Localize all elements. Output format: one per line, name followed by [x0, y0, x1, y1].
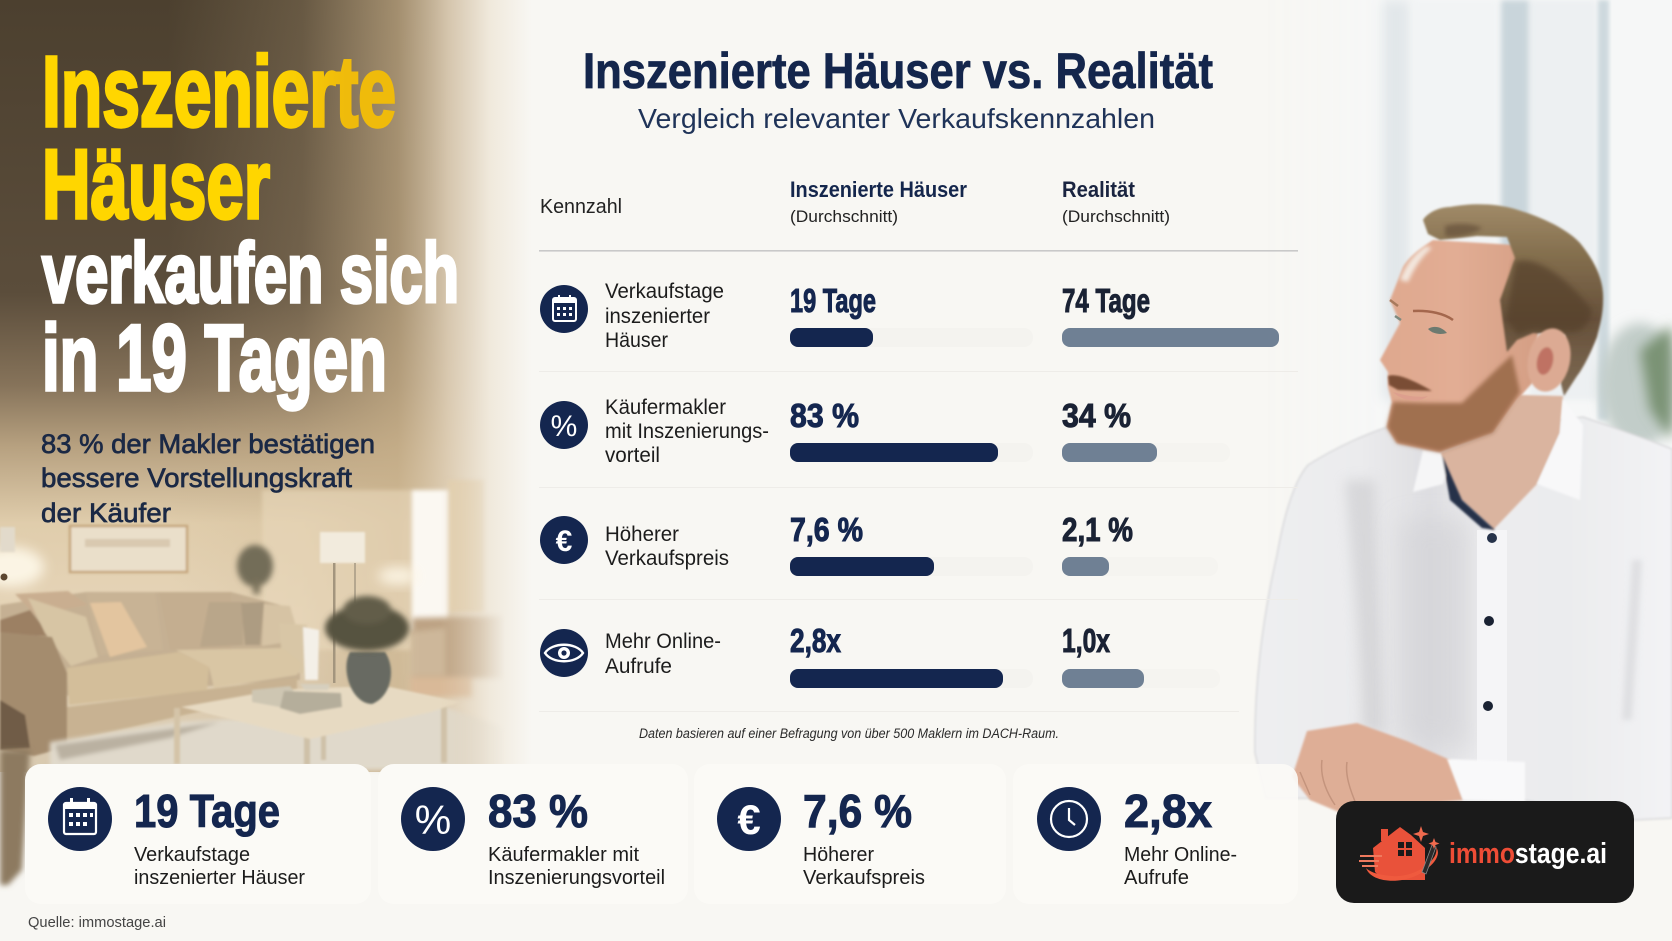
footnote: Daten basieren auf einer Befragung von über 500 Maklern im DACH-Raum.	[639, 726, 1059, 741]
bar: reality	[1062, 669, 1220, 688]
row 2: Käufermakler	[540, 396, 1230, 467]
icon: calendar	[540, 285, 588, 333]
table title: Inszenierte Häuser vs. Realität	[583, 43, 1213, 99]
card label	[134, 844, 305, 889]
right background: blurred window and plant	[1380, 0, 1672, 445]
bar: reality	[1062, 443, 1230, 462]
row label	[605, 396, 769, 467]
row 1: Verkaufstage	[540, 280, 1279, 352]
eye and brow	[1390, 300, 1453, 334]
row label: Käufermakler	[605, 396, 726, 419]
ear	[1522, 324, 1576, 396]
sub headline: 83 % der Makler bestätigen	[41, 429, 375, 459]
bar: reality	[1062, 557, 1218, 576]
sub headline	[41, 429, 375, 528]
floor lamp	[320, 532, 418, 683]
sub headline: bessere Vorstellungskraft	[41, 463, 352, 493]
card label: Käufermakler mit	[488, 844, 639, 866]
card label: Aufrufe	[1124, 867, 1189, 889]
headline line 2: Häuser	[42, 129, 270, 239]
icon: euro	[717, 787, 781, 851]
headline line 4: in 19 Tagen	[42, 305, 387, 410]
card value: 19 Tage	[134, 785, 280, 837]
face	[1380, 240, 1540, 452]
card value: 83 %	[488, 785, 588, 837]
forehead highlight	[1400, 246, 1432, 282]
card label	[488, 844, 665, 889]
left edge behind cards	[0, 750, 30, 885]
bar: staged	[790, 328, 1033, 347]
row label: vorteil	[605, 444, 660, 467]
hair	[1423, 204, 1603, 396]
row label: Verkaufstage	[605, 280, 724, 303]
hand	[1292, 723, 1463, 812]
shirt placket	[1477, 530, 1507, 765]
icon: percent	[540, 401, 588, 449]
table subtitle: Vergleich relevanter Verkaufskennzahlen	[638, 103, 1155, 134]
value: reality: 74 Tage	[1062, 282, 1150, 319]
row label	[605, 630, 721, 678]
card label: Verkaufspreis	[803, 867, 925, 889]
value: staged: 83 %	[790, 397, 859, 434]
bar: staged	[790, 557, 1033, 576]
card: 19 Tage	[25, 764, 371, 904]
headline line 1: Inszenierte	[42, 36, 396, 148]
card label: inszenierter Häuser	[134, 867, 305, 889]
icon: euro: €	[737, 796, 761, 843]
row label: inszenierter	[605, 305, 710, 328]
armchair by window	[410, 616, 510, 697]
table header: Realität	[1062, 177, 1170, 226]
rug	[47, 708, 460, 772]
neck	[1440, 395, 1563, 530]
sub headline: der Käufer	[41, 498, 171, 528]
card label	[803, 844, 925, 889]
icon: calendar	[48, 787, 112, 851]
row label: Höherer	[605, 523, 679, 546]
mouth	[1393, 392, 1428, 401]
card: 2,8x	[1013, 764, 1298, 904]
icon: percent	[401, 787, 465, 851]
coffee table	[174, 684, 460, 765]
row label: Verkaufspreis	[605, 547, 729, 570]
wall plant	[237, 545, 273, 594]
table header: Inszenierte Häuser: Inszenierte Häuser	[790, 177, 967, 202]
card label: Höherer	[803, 844, 874, 866]
table header: Realität: Realität	[1062, 177, 1136, 202]
value: reality: 1,0x	[1062, 622, 1110, 659]
vase	[346, 652, 391, 704]
row label: Häuser	[605, 329, 668, 352]
card label	[1124, 844, 1237, 889]
shirt	[1255, 417, 1672, 820]
logo wordmark: immostage.ai	[1449, 838, 1607, 870]
card value: 2,8x	[1124, 785, 1212, 837]
left background: staged living room	[0, 0, 560, 772]
table header: Realität: (Durchschnitt)	[1062, 207, 1170, 226]
row label: Aufrufe	[605, 655, 672, 678]
row 3: Höherer Verkaufspreis	[540, 511, 1218, 576]
card label: Verkaufstage	[134, 844, 250, 866]
row label: mit Inszenierungs-	[605, 420, 769, 443]
value: staged: 2,8x	[790, 622, 842, 659]
source line: Quelle: immostage.ai	[28, 914, 166, 931]
icon: euro	[540, 516, 588, 564]
headline line 3: verkaufen sich	[42, 226, 459, 320]
value: staged: 7,6 %	[790, 511, 863, 548]
wall picture	[70, 526, 187, 572]
person: man in white shirt	[1255, 204, 1672, 820]
row label: Mehr Online-	[605, 630, 721, 653]
bar: staged	[790, 669, 1033, 688]
table header: Inszenierte Häuser	[790, 177, 967, 226]
card label: Inszenierungsvorteil	[488, 867, 665, 889]
cuff	[1447, 759, 1525, 802]
moustache	[1388, 375, 1432, 391]
beard	[1387, 355, 1520, 452]
table header: Kennzahl: Kennzahl	[540, 196, 622, 218]
icon: clock	[1037, 787, 1101, 851]
icon: house logo	[1359, 826, 1440, 881]
bar: staged	[790, 443, 1033, 462]
window and curtain	[262, 480, 484, 650]
card label: Mehr Online-	[1124, 844, 1237, 866]
logo badge	[1336, 801, 1634, 903]
value: reality: 34 %	[1062, 397, 1131, 434]
headline	[42, 36, 459, 410]
value: reality: 2,1 %	[1062, 511, 1133, 548]
card value: 7,6 %	[803, 785, 912, 837]
icon: euro: €	[556, 525, 573, 558]
buttons	[1483, 533, 1497, 711]
bar: reality	[1062, 328, 1279, 347]
icon: percent: %	[415, 797, 451, 843]
row 4: Mehr Online-Aufrufe	[540, 622, 1220, 688]
left wall lamp	[0, 527, 44, 587]
collar	[1413, 399, 1583, 530]
sofa	[0, 591, 319, 756]
flower bouquet	[325, 596, 409, 651]
value: staged: 19 Tage	[790, 282, 876, 319]
icon: percent: %	[551, 410, 577, 443]
row label	[605, 280, 724, 352]
row label	[605, 523, 729, 570]
icon: eye	[540, 629, 588, 677]
card: 7,6 %	[694, 764, 1006, 904]
table header: Inszenierte Häuser: (Durchschnitt)	[790, 207, 898, 226]
card: 83 %	[378, 764, 688, 904]
